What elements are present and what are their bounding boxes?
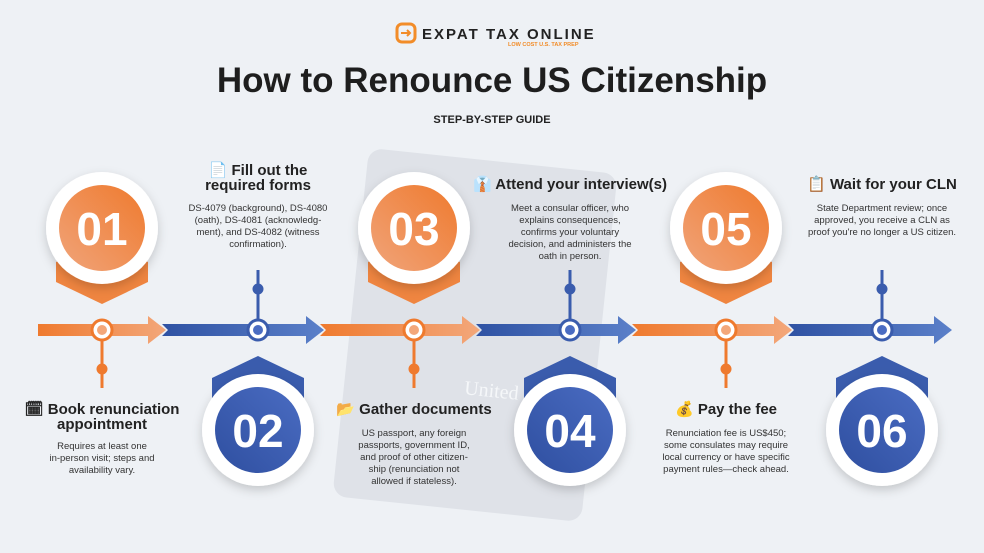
step 05 badge: 05: [700, 203, 752, 255]
step 05 text: some consulates may require: [664, 440, 788, 451]
step 04 text: [473, 175, 667, 262]
step 02 text: DS-4079 (background), DS-4080: [189, 203, 327, 214]
nodes and connectors: [92, 270, 892, 388]
step 02 text: [189, 161, 327, 250]
step 05 badge: [670, 172, 782, 304]
step 05 text: local currency or have specific: [662, 452, 790, 463]
logo: EXPAT TAX ONLINE: [422, 26, 596, 43]
logo: [397, 24, 596, 48]
step 01 text: [25, 400, 179, 476]
step 06 text: proof you're no longer a US citizen.: [808, 227, 956, 238]
step 01 badge: [46, 172, 158, 304]
step 01 text: 🗓 Book renunciation: [25, 400, 179, 418]
step 05 text: payment rules—check ahead.: [663, 464, 789, 475]
step 03 text: US passport, any foreign: [362, 428, 466, 439]
step 02 text: required forms: [205, 177, 311, 194]
step 01 text: Requires at least one: [57, 441, 147, 452]
step 05 text: 💰 Pay the fee: [675, 400, 777, 418]
step 03 text: allowed if stateless).: [371, 476, 457, 487]
step 04 text: decision, and administers the: [508, 239, 632, 250]
timeline arrows: [38, 316, 952, 344]
step 05 text: [662, 400, 790, 475]
step 05 text: Renunciation fee is US$450;: [666, 428, 786, 439]
step 03 text: and proof of other citizen-: [360, 452, 468, 463]
step 03 badge: 03: [388, 203, 440, 255]
step 04 text: confirms your voluntary: [521, 227, 619, 238]
step 01 text: availability vary.: [69, 465, 135, 476]
step 04 badge: 04: [544, 405, 596, 457]
step 03 text: passports, government ID,: [358, 440, 470, 451]
step 04 badge: [514, 356, 626, 486]
step 04 text: Meet a consular officer, who: [511, 203, 629, 214]
step 06 badge: 06: [856, 405, 908, 457]
step 03 text: [336, 401, 492, 487]
step 02 text: confirmation).: [229, 239, 287, 250]
step 06 text: [807, 175, 957, 238]
step 06 text: 📋 Wait for your CLN: [807, 175, 957, 193]
step 04 text: explains consequences,: [519, 215, 621, 226]
step 02 badge: 02: [232, 405, 284, 457]
step 03 text: 📂 Gather documents: [336, 401, 492, 418]
step 04 text: 👔 Attend your interview(s): [473, 175, 667, 193]
step 02 text: (oath), DS-4081 (acknowledg-: [195, 215, 321, 226]
step 03 badge: [358, 172, 470, 304]
passport background: [332, 148, 618, 522]
step 01 text: appointment: [57, 416, 147, 433]
step 06 text: State Department review; once: [817, 203, 947, 214]
step 06 text: approved, you receive a CLN as: [814, 215, 950, 226]
step 01 badge: 01: [76, 203, 128, 255]
step 04 text: oath in person.: [539, 251, 601, 262]
step 02 badge: [202, 356, 314, 486]
title: How to Renounce US Citizenship: [217, 61, 767, 100]
step 01 text: in-person visit; steps and: [49, 453, 155, 464]
step 03 text: ship (renunciation not: [369, 464, 460, 475]
step 02 text: 📄 Fill out the: [209, 161, 307, 179]
passport background: United St: [463, 377, 542, 407]
logo: LOW COST U.S. TAX PREP: [508, 42, 579, 48]
subtitle: STEP-BY-STEP GUIDE: [433, 114, 551, 126]
step 02 text: ment), and DS-4082 (witness: [196, 227, 320, 238]
step 06 badge: [826, 356, 938, 486]
